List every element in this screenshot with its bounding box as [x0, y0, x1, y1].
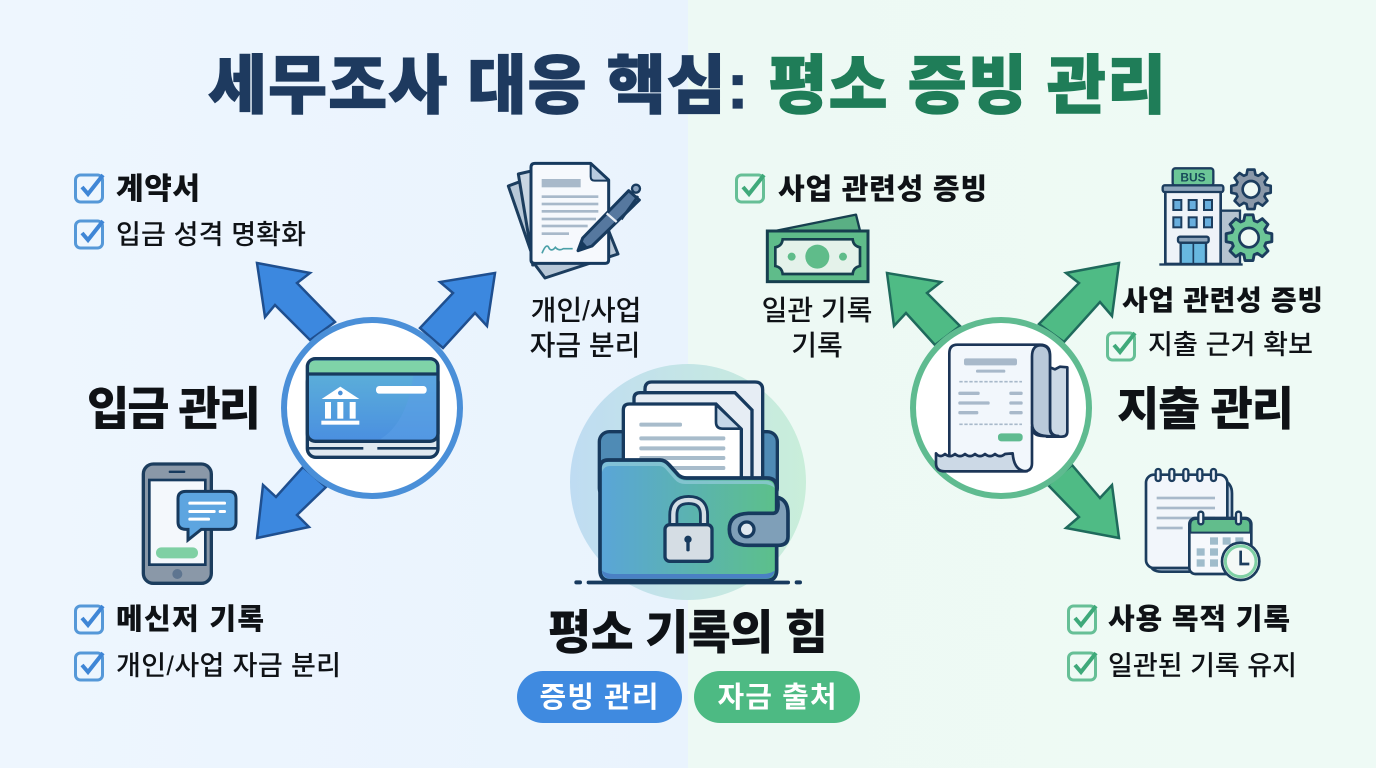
icon: banknotes: [767, 215, 868, 282]
heading: power of records: 평소 기록의 힘: [548, 606, 828, 659]
icon: receipt circle: [913, 320, 1089, 496]
pill: evidence management: 증빙 관리: [540, 681, 658, 714]
check item: separation: 개인/사업 자금 분리: [116, 651, 341, 681]
panel: contract document: [508, 163, 641, 361]
check item: consistent: 일관된 기록 유지: [1108, 651, 1297, 681]
check item: expense basis: 지출 근거 확보: [1148, 330, 1313, 360]
check item: business relevance top: 사업 관련성 증빙: [778, 173, 987, 206]
panel: expense management: [887, 168, 1323, 681]
icon: building and gears: [1159, 168, 1272, 266]
heading: expense: 지출 관리: [1117, 383, 1294, 435]
icon: building and gears: BUS: [1180, 171, 1206, 185]
panel: central folder: [517, 364, 860, 723]
pill: source of funds: 자금 출처: [718, 681, 836, 714]
icon: halo circle: [570, 364, 806, 600]
pill: source of funds: [694, 671, 860, 723]
panel: money: [736, 173, 987, 361]
heading: deposit: 입금 관리: [87, 383, 261, 435]
label: consistent record: 기록: [791, 330, 843, 361]
label: consistent record: 일관 기록: [762, 295, 872, 326]
background right: [688, 0, 1376, 768]
icon: notebook and calendar: [1146, 469, 1259, 580]
check item: messenger: 메신저 기록: [116, 603, 264, 636]
icon: signed document with pen: [508, 163, 640, 278]
label: personal business separation: 개인/사업: [531, 295, 641, 326]
arrows: deposit: [257, 263, 495, 538]
label: personal business separation: 자금 분리: [530, 330, 640, 361]
icon: phone with chat: [143, 464, 236, 583]
check item: deposit nature: 입금 성격 명확화: [116, 220, 306, 250]
icon: bank card circle: [284, 320, 460, 496]
arrows: expense: [887, 263, 1119, 538]
title: 세무조사 대응 핵심: 평소 증빙 관리: [208, 50, 1166, 122]
check item: purpose: 사용 목적 기록: [1108, 603, 1290, 636]
check item: contract: 계약서: [116, 173, 200, 206]
background left: [0, 0, 688, 768]
label: business relevance right: 사업 관련성 증빙: [1122, 285, 1323, 316]
pill: evidence management: [517, 671, 682, 723]
panel: deposit management: [76, 173, 495, 681]
icon: locked folder wallet: [574, 382, 802, 584]
check item: contract: [76, 173, 200, 206]
